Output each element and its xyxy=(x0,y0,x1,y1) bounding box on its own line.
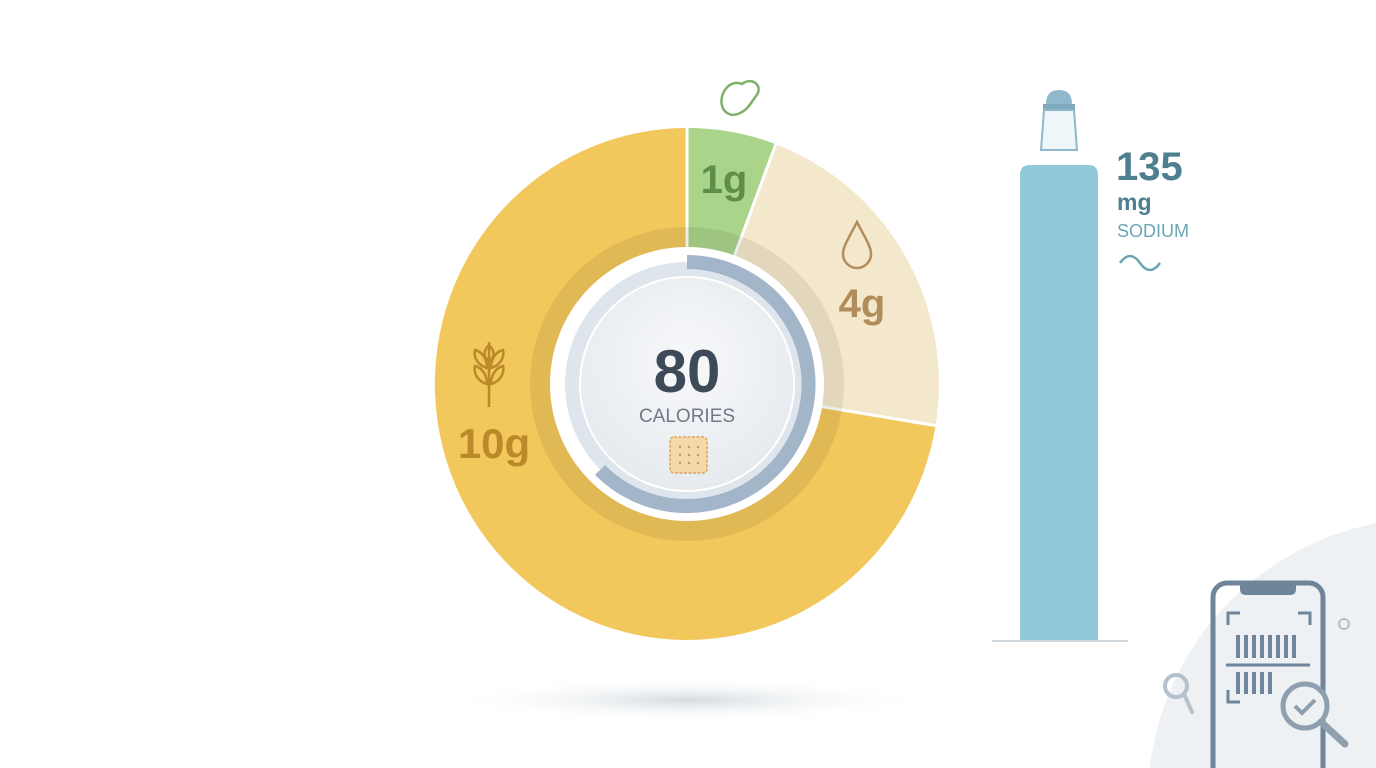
calories label: CALORIES xyxy=(639,406,735,427)
donut chart xyxy=(435,125,939,640)
slice: protein 1g xyxy=(687,128,775,384)
icon: cracker xyxy=(670,437,707,473)
icon: phone barcode scanner xyxy=(1213,583,1323,768)
text: mg xyxy=(1117,189,1152,215)
icon: salt shaker xyxy=(1041,90,1077,150)
text: SODIUM xyxy=(1117,221,1189,241)
label: fat 4g: 4g xyxy=(839,282,885,326)
sodium value: 135 xyxy=(1116,145,1183,189)
sodium bar xyxy=(1020,165,1098,640)
shadow under pie xyxy=(447,678,927,722)
icon: drop xyxy=(843,222,871,268)
label: carbs 10g: 10g xyxy=(458,420,530,467)
background circle: scanner xyxy=(1148,518,1376,768)
slice: fat 4g xyxy=(687,144,939,425)
icon: magnifier check xyxy=(1283,684,1345,744)
icon: bean xyxy=(721,81,759,115)
slice: carbs 10g xyxy=(435,128,936,640)
icon: wheat xyxy=(475,342,503,407)
label: protein 1g: 1g xyxy=(701,158,747,202)
calories value: 80 xyxy=(654,338,720,405)
icon: small magnifier xyxy=(1165,675,1192,712)
icon: wave xyxy=(1120,256,1160,270)
